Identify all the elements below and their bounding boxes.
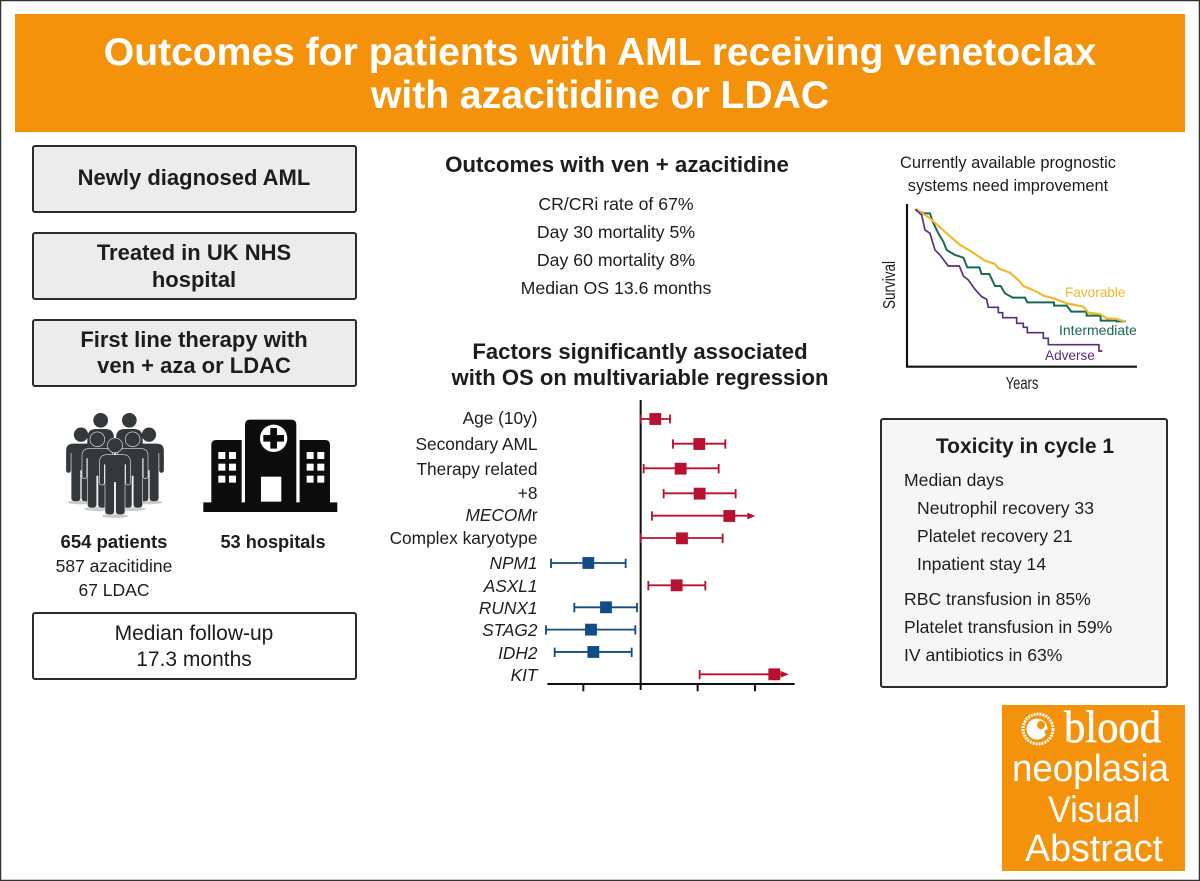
- forest plot: [546, 400, 795, 691]
- forest plot labels: IDH2: [498, 643, 538, 663]
- forest plot labels: ASXL1: [483, 576, 538, 596]
- logo: blood neoplasia visual abstract: neoplasia: [1012, 748, 1170, 790]
- outcomes list: CR/CRi rate of 67%: [538, 194, 694, 214]
- toxicity list: Median days: [904, 470, 1004, 490]
- toxicity list: RBC transfusion in 85%: [904, 589, 1091, 609]
- forest plot labels: NPM1: [489, 553, 538, 573]
- heading: factors associated with OS: Factors significantly associated: [472, 339, 808, 364]
- axis label: years: Years: [1006, 374, 1038, 394]
- outcomes list: Median OS 13.6 months: [521, 278, 712, 298]
- hospital count: 53 hospitals: [220, 532, 326, 552]
- patient counts: [56, 531, 172, 600]
- icon: group of patients: [66, 413, 164, 518]
- heading: factors associated with OS: with OS on multivariable regression: [451, 365, 828, 390]
- heading: factors associated with OS: [451, 339, 828, 390]
- forest plot labels: Age (10y): [463, 408, 538, 428]
- logo: blood neoplasia visual abstract: [1002, 701, 1185, 871]
- toxicity list: Inpatient stay 14: [917, 554, 1046, 574]
- forest plot labels: Therapy related: [416, 459, 538, 479]
- box: first line therapy: ven + aza or LDAC: [97, 353, 291, 378]
- forest plot labels: Complex karyotype: [390, 528, 538, 548]
- title banner: with azacitidine or LDAC: [370, 74, 829, 117]
- box: first line therapy: First line therapy with: [80, 327, 308, 352]
- curve: adverse: [915, 209, 1102, 351]
- title banner: Outcomes for patients with AML receiving venetoclax: [104, 31, 1096, 74]
- axis label: survival: Survival: [880, 261, 900, 309]
- forest plot labels: RUNX1: [479, 598, 538, 618]
- patient counts: 587 azacitidine: [56, 556, 172, 576]
- box: newly diagnosed AML: Newly diagnosed AML: [78, 165, 310, 190]
- box: treated in UK NHS hospital: hospital: [152, 267, 236, 292]
- heading: prognostic systems: systems need improvement: [908, 177, 1109, 195]
- toxicity list: IV antibiotics in 63%: [904, 645, 1063, 665]
- box: treated in UK NHS hospital: [33, 233, 356, 299]
- patient counts: 654 patients: [61, 531, 167, 552]
- axes: [547, 400, 795, 691]
- heading: prognostic systems: [900, 154, 1116, 195]
- risk factors: [641, 414, 789, 679]
- survival chart: Intermediate: [1059, 322, 1137, 338]
- curve: favorable: [915, 209, 1125, 322]
- toxicity list: Neutrophil recovery 33: [917, 498, 1094, 518]
- outcomes list: Day 60 mortality 8%: [537, 250, 695, 270]
- heading: outcomes with ven + azacitidine: Outcomes with ven + azacitidine: [445, 152, 789, 177]
- box: median follow-up: Median follow-up: [115, 622, 273, 645]
- panel heading: Toxicity in cycle 1: [936, 435, 1114, 458]
- survival chart: Adverse: [1045, 348, 1095, 363]
- toxicity list: [904, 470, 1113, 665]
- chart axes: [907, 204, 1137, 367]
- outcomes list: Day 30 mortality 5%: [537, 222, 695, 242]
- icon: hospital: [203, 420, 337, 512]
- survival chart: [880, 204, 1137, 394]
- forest plot labels: STAG2: [482, 620, 538, 640]
- box: median follow-up: 17.3 months: [136, 648, 252, 671]
- logo: blood neoplasia visual abstract: Visual: [1048, 789, 1140, 830]
- forest plot labels: Secondary AML: [416, 434, 538, 454]
- panel: toxicity in cycle 1: [881, 419, 1167, 687]
- forest plot labels: +8: [518, 483, 538, 503]
- logo: blood neoplasia visual abstract: Abstract: [1025, 828, 1163, 870]
- box: newly diagnosed AML: [33, 146, 356, 212]
- title banner: [15, 14, 1185, 132]
- box: median follow-up: [33, 613, 356, 679]
- protective factors: [546, 558, 637, 657]
- forest plot labels: [390, 408, 539, 685]
- curve labels: Favorable: [1065, 285, 1125, 300]
- forest plot labels: KIT: [511, 665, 539, 685]
- outcomes list: [521, 194, 712, 298]
- heading: prognostic systems: Currently available prognostic: [900, 154, 1116, 172]
- box: first line therapy: [33, 320, 356, 386]
- box: treated in UK NHS hospital: Treated in UK NHS: [97, 240, 291, 265]
- logo emblem: [1023, 714, 1053, 744]
- logo: blood neoplasia visual abstract: blood: [1064, 701, 1161, 752]
- toxicity list: Platelet recovery 21: [917, 526, 1072, 546]
- toxicity list: Platelet transfusion in 59%: [904, 617, 1113, 637]
- patient counts: 67 LDAC: [78, 580, 150, 600]
- curve: intermediate: [915, 209, 1126, 321]
- forest plot labels: MECOMr: [465, 505, 538, 525]
